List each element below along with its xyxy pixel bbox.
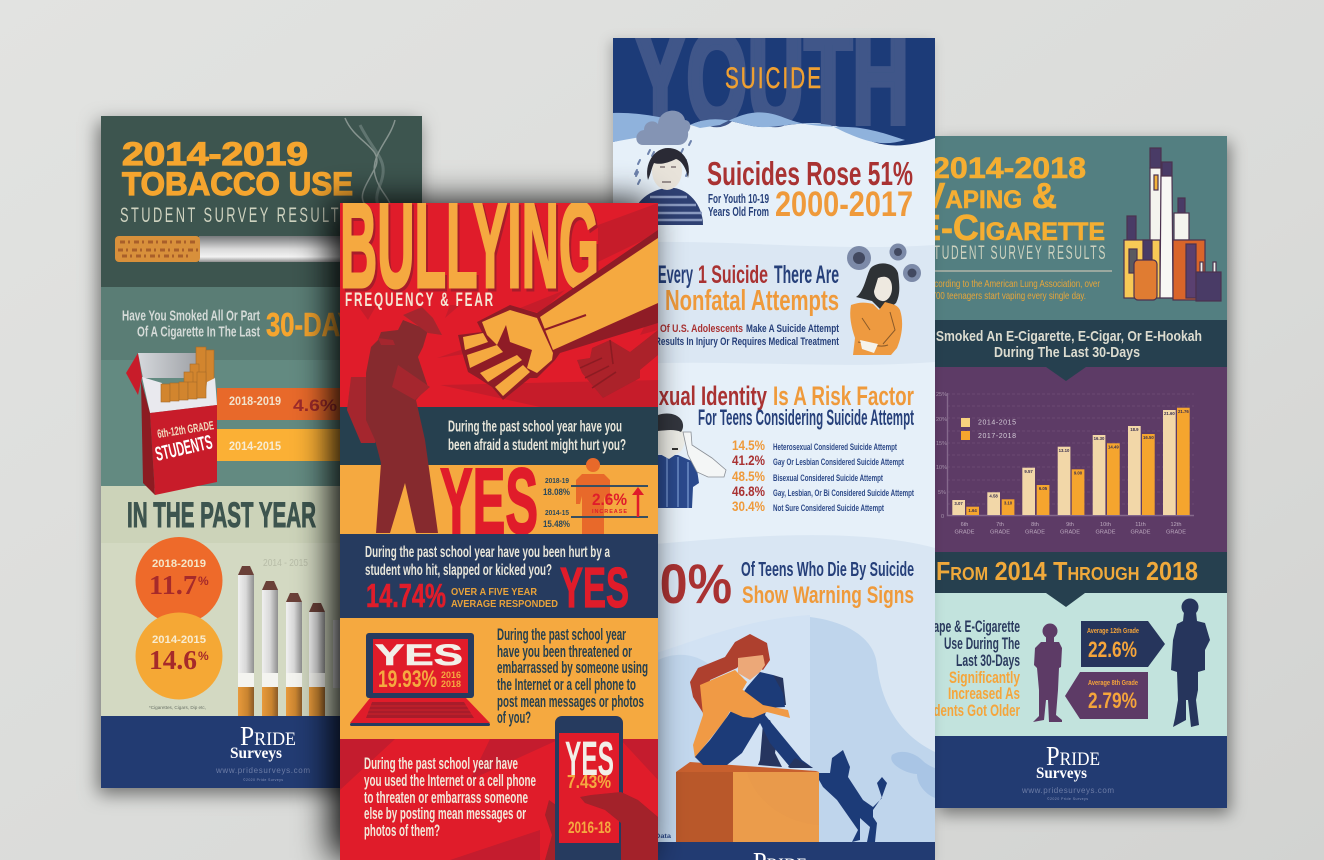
bar values: 4.58 xyxy=(989,494,998,498)
grade labels: 7th xyxy=(996,522,1004,528)
panel: bar chart: 5% xyxy=(938,490,946,496)
icon: worried woman xyxy=(847,244,921,355)
stat: suicides rose: For Youth 10-19 xyxy=(708,191,769,206)
band: from 2014 through 2018: From 2014 Through 2018 xyxy=(936,556,1198,586)
comparison text: Significantly xyxy=(949,668,1020,687)
icon: big fist xyxy=(458,230,658,400)
icon: laptop: 2018 xyxy=(441,679,461,689)
band: question heading: During The Last 30-Days xyxy=(994,344,1140,361)
band: used internet question: photos of them? xyxy=(364,822,440,840)
band: hit question: YES xyxy=(560,556,629,620)
title: vaping: Vaping & xyxy=(922,175,1057,216)
heading: in the past year: IN THE PAST YEAR xyxy=(127,496,316,535)
grade labels: GRADE xyxy=(1166,530,1186,536)
band: yes stat: 2.6% xyxy=(592,490,627,509)
band: threatened question: During the past school year xyxy=(497,626,626,644)
title: tobacco use xyxy=(122,142,352,196)
band xyxy=(613,242,935,365)
watermark: youth: YOUTH xyxy=(634,5,909,151)
icon: phone in hand: YES xyxy=(565,733,614,786)
question: 30-days: 30-DAYS xyxy=(266,306,372,343)
band: yes stat: 18.08% xyxy=(543,487,570,497)
footer: pride surveys logo: Pride xyxy=(1046,741,1100,771)
icon: laptop: 19.93% xyxy=(378,666,437,693)
stat: sexual identity heading: For Teens Considering Suicide Attempt xyxy=(698,405,914,430)
footer: pride surveys logo: ©2020 Pride Surveys xyxy=(1047,797,1088,801)
bar values: 18.9 xyxy=(1130,427,1139,432)
footer: pride surveys logo: Pride xyxy=(240,721,296,751)
icon: cigarette pack: 6th-12th GRADE xyxy=(156,418,215,441)
subtitle: FREQUENCY & FEAR xyxy=(345,290,495,311)
icon: tall student xyxy=(1171,598,1210,727)
panel: bar chart xyxy=(925,367,1227,552)
illustration: girl on box with cat xyxy=(613,615,935,842)
bar values: 16.30 xyxy=(1094,436,1105,441)
bars 2014-2015 xyxy=(952,410,1176,515)
band: used internet question: to threaten or embarrass someone xyxy=(364,789,528,807)
grade labels: 9th xyxy=(1066,522,1074,528)
footer: pride surveys logo xyxy=(925,736,1227,808)
grade labels: GRADE xyxy=(955,530,975,536)
stat: nonfatal attempts: Nonfatal Attempts xyxy=(665,285,839,317)
comparison text: Increased As xyxy=(948,684,1020,703)
tag: 12th grade xyxy=(1081,621,1165,667)
icon: sad boy xyxy=(632,148,703,225)
bar values: 9.57 xyxy=(1024,469,1033,474)
panel: bar chart: 25% xyxy=(936,392,947,398)
bar values xyxy=(954,409,1189,513)
icon: long cigarette xyxy=(115,236,340,262)
figure: student silhouette xyxy=(347,307,442,533)
box xyxy=(676,762,819,778)
circle: 2014-2015 value: 14.6 xyxy=(149,645,197,675)
stat: nonfatal attempts: Every xyxy=(658,261,693,289)
bar: 2014-2015 xyxy=(217,429,340,461)
band: question heading: Have You Smoked An E-Cigarette, E-Cigar, Or E-Hookah xyxy=(878,328,1202,345)
tag: 8th grade xyxy=(1065,672,1148,719)
icon: short student xyxy=(1033,624,1062,722)
stat: warning signs: 90% xyxy=(632,552,732,615)
grade labels: GRADE xyxy=(1131,530,1151,536)
band: afraid question: been afraid a student might hurt you? xyxy=(448,437,626,454)
stat: suicides rose: Suicides Rose 51% xyxy=(707,155,913,192)
panel: bar chart: 10% xyxy=(936,465,947,471)
band: threatened question: the Internet or a cell phone to xyxy=(497,676,636,694)
wave xyxy=(613,112,905,143)
title: tobacco use: TOBACCO USE xyxy=(122,166,353,202)
panel: bar chart: 0 xyxy=(941,514,944,520)
band: threatened question: have you been threatened or xyxy=(497,643,632,661)
footer: pride surveys logo: Surveys xyxy=(230,745,282,762)
bar values: 9.00 xyxy=(1074,470,1083,476)
bar values: 3.07 xyxy=(954,501,963,506)
panel: older students comparison xyxy=(915,593,1227,736)
plant shadow xyxy=(891,752,935,798)
stat: suicides rose: 2000-2017 xyxy=(775,185,913,224)
stat: warning signs xyxy=(632,552,914,615)
title: vaping: E-Cigarette xyxy=(917,207,1105,248)
stat: nonfatal attempts: 1 Suicide xyxy=(698,261,768,289)
panel: tobacco use poster xyxy=(101,116,422,788)
girl hair xyxy=(690,634,770,713)
panel: bullying poster xyxy=(340,177,658,860)
stat: sexual identity heading: Is A Risk Factor xyxy=(773,381,914,411)
band: threatened question xyxy=(340,618,658,739)
band: yes stat: 2018-19 xyxy=(545,476,569,485)
question: 30-days: Of A Cigarette In The Last xyxy=(137,324,260,340)
footer: pride surveys logo xyxy=(613,842,935,860)
lower band xyxy=(613,535,935,860)
stat: warning signs: Of Teens Who Die By Suicide xyxy=(741,559,914,581)
circle: 2018-2019 value: 2018-2019 xyxy=(152,558,206,570)
band: used internet question: else by posting mean messages or xyxy=(364,805,526,823)
comparison text: Use During The xyxy=(944,634,1020,653)
icon: laptop: 2016 xyxy=(441,670,461,680)
chart: percent list: Gay Or Lesbian Considered Suicide Attempt xyxy=(773,457,905,468)
panel: bar chart: 20% xyxy=(936,417,947,423)
grade labels xyxy=(954,522,1186,534)
band: hit question: OVER A FIVE YEAR xyxy=(451,587,538,598)
icon: vape devices xyxy=(1124,148,1221,301)
comparison text: Students Got Older xyxy=(915,701,1020,720)
icon: phone in hand: 2016-18 xyxy=(568,818,611,837)
stat: sexual identity heading xyxy=(636,381,914,430)
chart: percent list: 14.5% xyxy=(732,437,765,453)
icon: person thermometer xyxy=(576,458,610,534)
girl arm xyxy=(713,683,790,718)
intro text xyxy=(935,280,1100,301)
bars 2017-2018 xyxy=(966,408,1190,515)
tag: 12th grade: Average 12th Grade xyxy=(1087,628,1139,635)
band: used internet question xyxy=(340,716,658,860)
header navy area xyxy=(613,38,935,145)
bar values: 6.05 xyxy=(1039,486,1048,491)
tag: 12th grade: 22.6% xyxy=(1088,637,1137,662)
stat: suicides rose: Years Old From xyxy=(708,204,769,219)
band: used internet question: During the past school year have xyxy=(364,755,518,773)
circle: 2014-2015 value: 2014-2015 xyxy=(152,634,206,646)
grade labels: GRADE xyxy=(1096,530,1116,536)
panel: bar chart: 15% xyxy=(936,441,947,447)
icon: phone in hand xyxy=(545,716,658,860)
band: yes stat: 15.48% xyxy=(543,519,570,529)
chart: percent list: Heterosexual Considered Suicide Attempt xyxy=(773,442,898,453)
tag: 8th grade: Average 8th Grade xyxy=(1088,680,1138,687)
band: hit question: student who hit, slapped or kicked you? xyxy=(365,562,552,579)
comparison text xyxy=(935,620,1020,716)
girl back leg xyxy=(758,720,782,767)
bar: 2018-2019: 4.6% xyxy=(293,396,337,415)
grade labels: 8th xyxy=(1031,522,1039,528)
panel: bullying poster: BULLYING xyxy=(342,180,601,316)
bar: 2018-2019: 2018-2019 xyxy=(229,396,281,408)
bar values: 21.60 xyxy=(1164,411,1175,416)
title: suicide: SUICIDE xyxy=(725,62,823,95)
icon: laptop: YES xyxy=(375,639,463,672)
band: afraid question xyxy=(340,407,658,465)
subtitle: STUDENT SURVEY RESULTS xyxy=(120,204,352,227)
chart: cigarette bars xyxy=(238,558,349,716)
circle: 2018-2019 value xyxy=(136,537,222,624)
band: yes stat xyxy=(340,449,658,553)
band: hit question: AVERAGE RESPONDED xyxy=(451,599,558,610)
grade labels: 11th xyxy=(1135,522,1146,528)
footer: pride surveys logo: www.pridesurveys.com xyxy=(215,766,310,775)
icon: phone in hand: 7.43% xyxy=(567,772,611,792)
band: yes stat: INCREASE xyxy=(592,509,627,515)
band: threatened question: post mean messages or photos xyxy=(497,693,644,711)
bar: 2018-2019 xyxy=(217,388,340,420)
intro text: According to the American Lung Association, over xyxy=(925,278,1100,290)
grade labels: 12th xyxy=(1171,522,1181,528)
stat: sexual identity heading: Sexual Identity xyxy=(636,381,767,411)
bar values: 1.64 xyxy=(968,508,977,513)
legend xyxy=(961,418,1016,440)
chart: percent list xyxy=(732,437,915,514)
circle: 2014-2015 value xyxy=(136,612,222,700)
title: vaping: 2014-2018 xyxy=(932,152,1086,185)
panel: bullying poster: BULLYING xyxy=(340,177,599,313)
girl face xyxy=(738,655,765,680)
icon: second fist xyxy=(577,330,658,398)
grade labels: 6th xyxy=(961,522,968,528)
girl front leg xyxy=(695,672,813,768)
bar values: 21.76 xyxy=(1178,409,1189,414)
comparison text: Vape & E-Cigarette xyxy=(927,617,1020,636)
stat: nonfatal attempts: There Are xyxy=(774,261,839,289)
band: question heading xyxy=(878,320,1227,367)
bar values: 14.49 xyxy=(1108,444,1119,450)
band: threatened question: embarrassed by someone using xyxy=(497,659,648,677)
grade labels: GRADE xyxy=(990,530,1010,536)
bar values: 13.10 xyxy=(1059,448,1070,453)
panel: vaping poster xyxy=(878,136,1227,808)
rays xyxy=(358,203,658,407)
chart: percent list: Bisexual Considered Suicide Attempt xyxy=(773,473,884,484)
icon: rain cloud xyxy=(635,111,691,184)
chart: percent list: Gay, Lesbian, Or Bi Considered Suicide Attempt xyxy=(773,488,915,499)
chart: percent list: 48.5% xyxy=(732,468,765,484)
circle: 2018-2019 value: % xyxy=(198,574,209,588)
circle: 2018-2019 value: 11.7 xyxy=(149,570,197,600)
girl torso xyxy=(693,670,747,758)
footer: pride surveys logo: ©2020 Pride Surveys xyxy=(243,778,283,782)
chart: percent list: 41.2% xyxy=(732,452,765,468)
grade labels: GRADE xyxy=(1025,530,1045,536)
band: threatened question: of you? xyxy=(497,709,531,727)
icon: smoke xyxy=(345,118,395,215)
chart: percent list: 46.8% xyxy=(732,483,765,499)
chart: percent list: Not Sure Considered Suicide Attempt xyxy=(773,503,885,514)
legend: 2014-2015 xyxy=(978,420,1016,426)
icon: cigarette pack xyxy=(126,347,217,495)
tag: 8th grade: 2.79% xyxy=(1088,688,1137,713)
intro text: 3,700 teenagers start vaping every single day. xyxy=(925,290,1086,302)
cat xyxy=(819,750,887,842)
bar values: 16.50 xyxy=(1143,435,1154,440)
band: used internet question: you used the Internet or a cell phone xyxy=(364,772,536,790)
band: hit question: 14.74% xyxy=(366,577,446,614)
question: 30-days: Have You Smoked All Or Part xyxy=(122,308,260,324)
band: hit question: During the past school year have you been hurt by a xyxy=(365,544,610,561)
band: afraid question: During the past school year have you xyxy=(448,418,622,436)
icon: stressed teen xyxy=(658,413,726,508)
band: yes stat: 2014-15 xyxy=(545,508,569,517)
chart: percent list: 30.4% xyxy=(732,498,765,514)
question: 30-days xyxy=(122,310,340,340)
stat: warning signs: Show Warning Signs xyxy=(742,582,914,609)
subtitle: STUDENT SURVEY RESULTS xyxy=(925,243,1107,264)
legend: 2017-2018 xyxy=(978,433,1016,440)
footnote: *Cigarettes, Cigars, Dip etc, xyxy=(149,705,206,710)
stat: nonfatal attempts: Make A Suicide Attempt xyxy=(746,323,839,335)
grade labels: 10th xyxy=(1100,522,1111,528)
title: bullying xyxy=(340,177,601,316)
stat: nonfatal attempts: Of U.S. Adolescents xyxy=(660,323,743,335)
circle: 2014-2015 value: % xyxy=(198,649,209,663)
title: vaping xyxy=(935,157,1104,240)
panel: youth suicide poster xyxy=(613,5,935,860)
title: tobacco use: 2014-2019 xyxy=(122,136,308,172)
stat: nonfatal attempts xyxy=(655,261,839,348)
bar: 2014-2015: 2014-2015 xyxy=(229,441,282,453)
icon: cigarette pack: STUDENTS xyxy=(153,431,215,466)
bar values: 3.10 xyxy=(1004,500,1013,506)
stat: suicides rose xyxy=(707,155,913,224)
comparison text: Last 30-Days xyxy=(956,651,1020,670)
data source: Data xyxy=(655,833,671,840)
grade labels: GRADE xyxy=(1060,530,1080,536)
chart: cigarette bars: 2014 - 2015 xyxy=(263,558,308,569)
footer: pride surveys logo: Surveys xyxy=(1036,765,1087,782)
band: yes stat: YES xyxy=(440,449,538,553)
icon: laptop xyxy=(350,633,490,726)
band: hit question xyxy=(340,534,658,620)
footer: pride surveys logo: www.pridesurveys.com xyxy=(1021,786,1114,795)
footer: pride surveys logo xyxy=(101,716,422,788)
stat: nonfatal attempts: Results In Injury Or Requires Medical Treatment xyxy=(655,336,839,348)
